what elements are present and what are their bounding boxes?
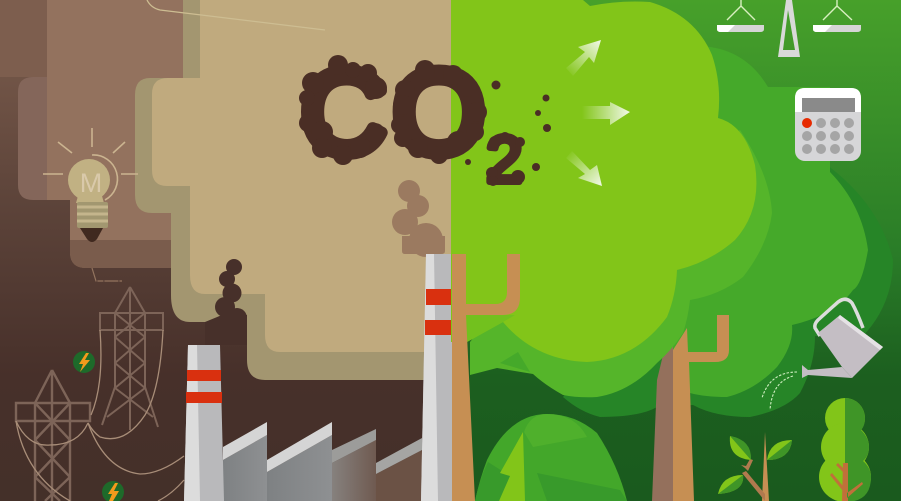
icon: lightning badge upper	[73, 351, 95, 373]
power lines	[16, 330, 184, 501]
arrow: right	[582, 102, 630, 125]
icon: transmission tower right	[100, 287, 163, 430]
letter O: O	[393, 47, 485, 179]
chimney right	[421, 254, 452, 501]
tree canopy: mid green layer	[640, 46, 868, 397]
arrow: up right	[566, 40, 601, 76]
smoke bumps	[299, 55, 551, 186]
tree canopy: lighter layer	[470, 130, 772, 397]
panel: tan sky layer	[152, 0, 451, 352]
tree trunk right dark side	[652, 340, 673, 501]
arrow: down right	[566, 151, 602, 186]
tree canopy: dark back layer	[563, 165, 893, 417]
icon: watering can	[802, 299, 883, 378]
subscript 2: 2	[486, 122, 523, 196]
top thin line	[147, 0, 325, 30]
connector dashed line	[92, 268, 122, 281]
panel: stepped brown layers	[0, 0, 190, 268]
pale smoke plume	[392, 180, 445, 257]
icon: light bulb	[43, 128, 138, 242]
pine	[499, 432, 525, 501]
icon: balance scale	[717, 0, 861, 57]
icon: lightning badge lower	[102, 481, 124, 501]
label: M on bulb: M	[80, 168, 102, 198]
water drops	[762, 372, 797, 410]
factory building	[223, 422, 422, 501]
tree canopy: main lime layer	[451, 0, 756, 362]
tree trunk left with branch	[452, 254, 520, 501]
shade patch	[500, 352, 530, 372]
CO2 smoke lettering	[299, 47, 551, 196]
panel: polluted brown background	[0, 0, 451, 501]
icon: sapling	[718, 432, 792, 501]
icon: calculator	[795, 88, 861, 161]
icon: round tree	[819, 398, 871, 501]
dark smoke plume	[205, 259, 247, 345]
tree trunk right with branch	[673, 315, 729, 501]
canopy left shade	[466, 315, 515, 342]
letter C: C	[301, 47, 386, 179]
small tree with pine	[475, 414, 627, 501]
panel: olive stepped layer	[135, 0, 451, 380]
panel: green background	[451, 0, 901, 501]
chimney left	[184, 345, 224, 501]
icon: transmission tower left	[16, 370, 90, 501]
